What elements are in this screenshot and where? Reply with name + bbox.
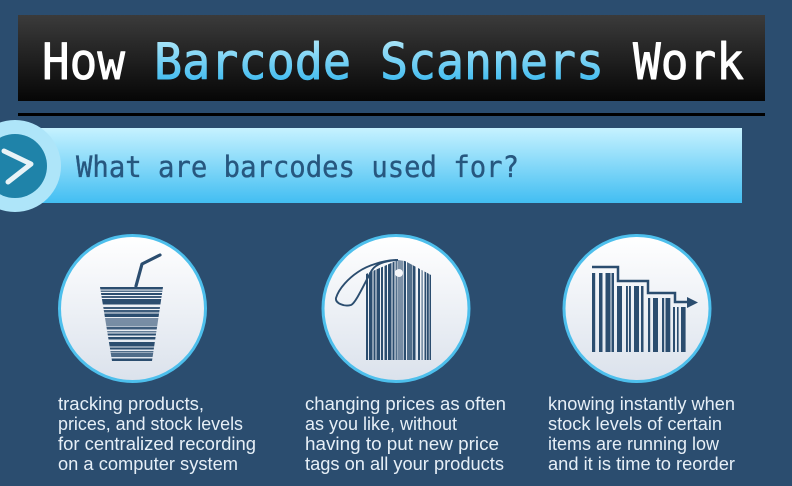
icon: barcode price tag bbox=[323, 236, 469, 382]
caption: knowing instantly: knowing instantly when bbox=[548, 393, 735, 414]
caption: changing prices: tags on all your products bbox=[305, 453, 504, 474]
caption: knowing instantly: items are running low bbox=[548, 433, 720, 454]
caption: tracking products: for centralized recording bbox=[58, 433, 256, 454]
title: Work bbox=[633, 33, 744, 91]
section heading: What are barcodes used for? bbox=[76, 150, 519, 184]
panel: knowing instantly bbox=[548, 236, 735, 474]
icon: barcode cup bbox=[60, 236, 206, 382]
caption: knowing instantly: and it is time to reorder bbox=[548, 453, 735, 474]
caption: changing prices: as you like, without bbox=[305, 413, 457, 434]
icon: arrow badge bbox=[0, 120, 61, 212]
panel: tracking products bbox=[58, 236, 256, 474]
caption: knowing instantly: stock levels of certain bbox=[548, 413, 722, 434]
title: Barcode bbox=[154, 33, 351, 91]
title bar bbox=[18, 15, 765, 101]
section banner bbox=[30, 128, 742, 203]
panel: changing prices bbox=[305, 236, 506, 474]
title: How bbox=[42, 33, 126, 91]
caption: tracking products bbox=[58, 393, 256, 474]
caption: changing prices: changing prices as often bbox=[305, 393, 506, 414]
caption: tracking products: tracking products, bbox=[58, 393, 204, 414]
caption: changing prices bbox=[305, 393, 506, 474]
title bbox=[42, 33, 744, 91]
title: Scanners bbox=[380, 33, 604, 91]
icon: barcode declining stock chart bbox=[564, 236, 710, 382]
caption: changing prices: having to put new price bbox=[305, 433, 499, 454]
caption: knowing instantly bbox=[548, 393, 735, 474]
caption: tracking products: on a computer system bbox=[58, 453, 238, 474]
caption: tracking products: prices, and stock levels bbox=[58, 413, 243, 434]
